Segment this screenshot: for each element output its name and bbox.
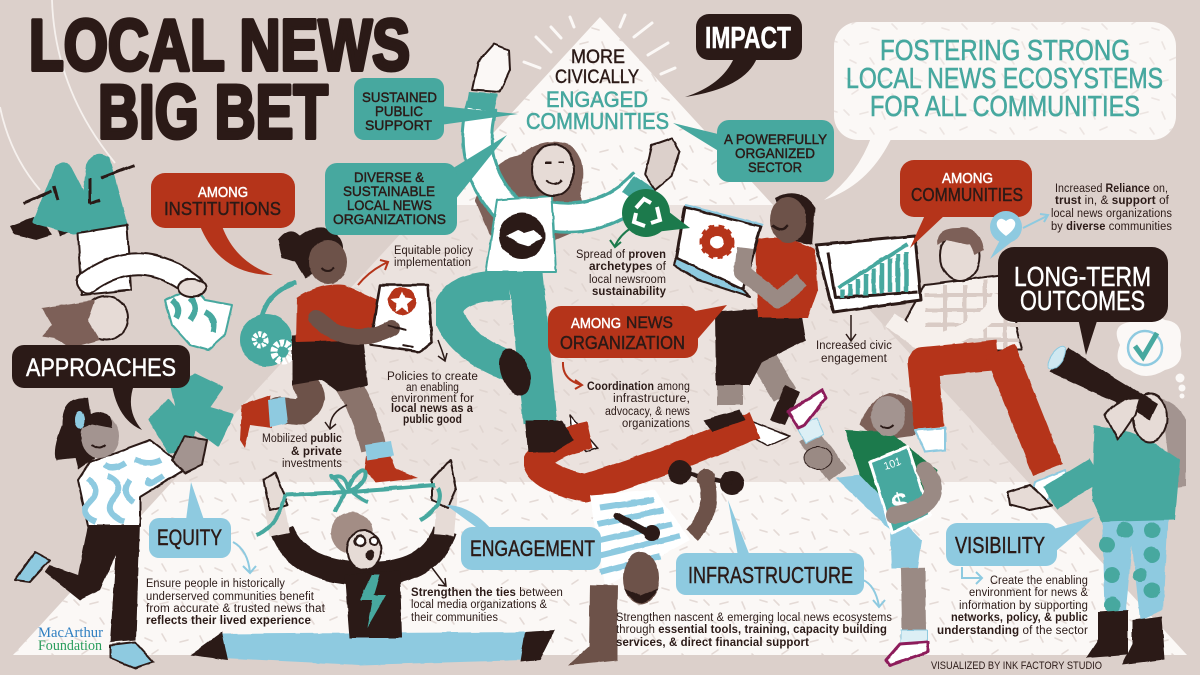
bubble: equity bbox=[149, 482, 231, 558]
bubble: long-term outcomes bbox=[998, 247, 1168, 355]
head bbox=[871, 396, 905, 436]
bubble: among news organization: NEWS bbox=[626, 313, 673, 332]
logo: MacArthur Foundation: MacArthur bbox=[38, 625, 103, 641]
shoes bbox=[190, 630, 555, 662]
bubble: sustained public support bbox=[354, 78, 518, 140]
raised arm bbox=[477, 105, 508, 210]
hair bbox=[475, 142, 590, 240]
hands bbox=[264, 460, 456, 510]
shoes bbox=[494, 345, 536, 399]
note: policies: local news as a bbox=[391, 403, 473, 415]
bubble: equity: EQUITY bbox=[157, 525, 222, 550]
note: engagement description bbox=[411, 587, 563, 624]
lower leg bbox=[603, 585, 604, 650]
hair bbox=[860, 393, 920, 440]
arrows between text and figures bbox=[233, 214, 1048, 607]
bubble: among news organization: ORGANIZATION bbox=[560, 333, 685, 353]
head bbox=[84, 296, 128, 340]
arms bbox=[282, 530, 445, 574]
signature lines bbox=[388, 325, 414, 347]
sock bbox=[901, 630, 927, 644]
teal sweater bbox=[1092, 425, 1180, 522]
head bbox=[309, 240, 347, 284]
arm with dumbbell bbox=[692, 482, 709, 535]
note: engagement description: local media organizations & bbox=[411, 599, 547, 611]
figure: upside-down person with puzzle bbox=[10, 155, 232, 350]
hand on leg bbox=[804, 447, 832, 469]
note: spread of archetypes bbox=[576, 249, 667, 298]
heading: impact statement text: CIVICALLY bbox=[555, 67, 639, 88]
face bbox=[347, 530, 381, 570]
red trousers bbox=[537, 425, 755, 488]
figure: person tying ribbon bbox=[190, 460, 555, 665]
recycle icon bbox=[622, 189, 690, 237]
polka trousers bbox=[1102, 515, 1168, 620]
gear balloon bbox=[240, 282, 296, 366]
head bbox=[81, 414, 119, 458]
side arm bbox=[530, 182, 645, 218]
heading: impact statement text: COMMUNITIES bbox=[526, 108, 669, 134]
note: civic engagement bbox=[816, 340, 892, 365]
bubble: long-term outcomes: OUTCOMES bbox=[1020, 285, 1145, 316]
sunburst rays at apex bbox=[524, 15, 675, 74]
legs bbox=[730, 345, 785, 405]
bubble: diverse and sustainable organizations: LOCAL NEWS bbox=[347, 197, 432, 213]
wrench bbox=[617, 516, 650, 534]
note: policies: an enabling bbox=[406, 382, 459, 394]
bubble: fostering strong ecosystems: FOR ALL COMMUNITIES bbox=[870, 91, 1140, 123]
note: mobilized investments bbox=[262, 433, 342, 470]
front leg bbox=[345, 380, 374, 450]
face bbox=[532, 144, 574, 196]
shirt torso bbox=[78, 225, 131, 295]
shirt grid bbox=[925, 280, 1020, 350]
hair bbox=[42, 300, 100, 348]
shoe bbox=[886, 642, 928, 665]
note: visibility description: environment for news & bbox=[969, 587, 1088, 599]
teal trousers bbox=[34, 155, 127, 233]
gear bbox=[706, 231, 728, 253]
shoes bbox=[703, 385, 800, 432]
hair top bbox=[78, 412, 112, 430]
shirt bbox=[905, 275, 1022, 350]
bubble: fostering strong ecosystems: FOSTERING STRONG bbox=[880, 35, 1130, 67]
figure: woman with puzzle piece bbox=[15, 375, 232, 668]
figure: green shirt person with money: $ bbox=[887, 486, 914, 523]
title: BIG BET bbox=[98, 70, 328, 155]
bubble: approaches bbox=[12, 345, 190, 430]
black trousers bbox=[45, 522, 140, 642]
bubble: long-term outcomes: LONG-TERM bbox=[1014, 261, 1151, 292]
note: mobilized investments: investments bbox=[282, 458, 342, 470]
note: policies: environment for bbox=[391, 393, 474, 405]
bubble: infrastructure bbox=[676, 500, 864, 595]
bubble: a powerfully organized sector: SECTOR bbox=[748, 159, 802, 175]
note: spread of archetypes: archetypes of bbox=[589, 261, 667, 273]
head bbox=[1133, 394, 1167, 442]
white shoes bbox=[570, 415, 790, 452]
arm bbox=[895, 470, 933, 515]
red shirt bbox=[296, 285, 378, 342]
blue legs bbox=[222, 632, 525, 665]
pants fold lines bbox=[24, 165, 135, 204]
bubble: visibility bbox=[946, 517, 1095, 566]
laptop base bbox=[674, 258, 750, 297]
bubble: among institutions: INSTITUTIONS bbox=[164, 199, 281, 219]
telescope bbox=[1050, 348, 1158, 420]
bubble: a powerfully organized sector: A POWERFULLY bbox=[724, 131, 828, 147]
star seal bbox=[388, 287, 416, 315]
bent leg bbox=[448, 285, 515, 368]
hand bbox=[1008, 485, 1052, 510]
bubble: infrastructure: INFRASTRUCTURE bbox=[688, 562, 853, 588]
head bbox=[770, 197, 806, 243]
note: among communities outcome: by diverse communities bbox=[1051, 221, 1172, 233]
note: among communities outcome: local news organizations bbox=[1051, 208, 1172, 220]
arm bbox=[316, 318, 392, 337]
note: spread of archetypes: sustainability bbox=[592, 286, 666, 298]
standing leg bbox=[913, 568, 914, 630]
forearms bbox=[272, 490, 448, 535]
note: among communities outcome: trust in, & support of bbox=[1055, 195, 1170, 207]
head upside-down bbox=[623, 552, 659, 604]
hair bbox=[938, 228, 984, 255]
heading: impact statement text bbox=[526, 47, 669, 134]
hand on telescope bbox=[1105, 398, 1140, 440]
note: among communities outcome: Increased Reliance on, bbox=[1055, 183, 1168, 195]
credit line: VISUALIZED BY INK FACTORY STUDIO bbox=[931, 660, 1102, 672]
logo: MacArthur Foundation bbox=[38, 625, 103, 654]
red leg back bbox=[923, 355, 998, 428]
polka dots bbox=[1099, 522, 1160, 613]
bubble: among institutions: AMONG bbox=[198, 184, 248, 201]
note: infrastructure description: services, & direct financial support bbox=[616, 637, 809, 649]
bubble: approaches: APPROACHES bbox=[26, 354, 176, 382]
note: coordination: Coordination among bbox=[587, 381, 690, 393]
bubble: among news organization: AMONG bbox=[571, 315, 621, 332]
note: civic engagement: Increased civic bbox=[816, 340, 892, 352]
heading: impact statement text: MORE bbox=[571, 47, 625, 68]
hair bbox=[1150, 396, 1186, 488]
dumbbell bbox=[668, 460, 744, 495]
note: visibility description bbox=[937, 575, 1088, 637]
title: LOCAL NEWS bbox=[29, 6, 410, 86]
laptop screen bbox=[676, 207, 761, 290]
shirt bbox=[486, 196, 556, 272]
bubble: among communities bbox=[900, 160, 1032, 248]
figure: person with red trousers and wrench bbox=[537, 415, 790, 665]
figure: teal central woman reaching upward bbox=[448, 44, 680, 452]
bubble: diverse and sustainable organizations: DIVERSE & bbox=[354, 169, 425, 185]
mouth bbox=[366, 550, 374, 560]
boots bbox=[240, 395, 272, 448]
figure: telescope person bbox=[1008, 344, 1186, 665]
note: coordination: advocacy, & news bbox=[605, 406, 690, 418]
bubble: among institutions bbox=[151, 173, 295, 275]
note: coordination bbox=[587, 381, 690, 430]
note: equity description bbox=[146, 578, 326, 627]
handshake logo bbox=[499, 213, 545, 259]
bubble: diverse and sustainable organizations bbox=[325, 135, 507, 235]
blue shorts bbox=[836, 475, 922, 568]
torso bbox=[345, 570, 402, 638]
hands bbox=[172, 436, 207, 473]
figure: green shirt person with money: 101 bbox=[882, 455, 903, 473]
bubble: sustained public support: SUPPORT bbox=[365, 117, 432, 133]
arm bbox=[88, 264, 192, 285]
note: spread of archetypes: Spread of proven bbox=[576, 249, 666, 261]
hair braids bbox=[775, 193, 815, 245]
note: mobilized investments: Mobilized public bbox=[262, 433, 342, 445]
heading: impact statement text: ENGAGED bbox=[546, 87, 648, 112]
note: coordination: organizations bbox=[622, 418, 690, 430]
bubble: sustained public support: SUSTAINED bbox=[362, 89, 437, 105]
shoes bbox=[15, 552, 153, 668]
second hand bbox=[645, 138, 680, 190]
raised hand bbox=[472, 44, 510, 92]
note: coordination: infrastructure, bbox=[613, 393, 690, 405]
pyramid top tier: impact bbox=[427, 17, 773, 205]
second cuff bbox=[622, 176, 656, 204]
note: policies bbox=[387, 371, 478, 426]
logo: MacArthur Foundation: Foundation bbox=[38, 638, 102, 654]
hand bbox=[178, 279, 206, 297]
note: visibility description: information by supporting bbox=[959, 600, 1088, 612]
note: equity description: reflects their lived experience bbox=[146, 615, 311, 627]
note: infrastructure description: Strengthen nascent & emerging local news ecosystems bbox=[616, 612, 892, 624]
figure: woman with laptop bbox=[674, 193, 818, 432]
red shirt bbox=[755, 238, 818, 318]
ribbon bbox=[256, 470, 440, 535]
arm bbox=[890, 295, 1000, 345]
money bbox=[870, 447, 930, 533]
note: infrastructure description bbox=[616, 612, 892, 649]
patterned top bbox=[78, 440, 184, 526]
note: spread of archetypes: local newsroom bbox=[589, 274, 666, 286]
note: equitable policy: Equitable policy bbox=[394, 245, 473, 257]
ponytail bbox=[55, 398, 95, 470]
striped shirt bbox=[590, 490, 690, 586]
note: equity description: Ensure people in historically bbox=[146, 578, 285, 590]
note: equitable policy bbox=[394, 245, 473, 269]
bubble: sustained public support: PUBLIC bbox=[375, 103, 423, 119]
note: equity description: from accurate & trusted news that bbox=[146, 603, 326, 615]
bubble: impact bbox=[685, 14, 802, 97]
standing leg bbox=[525, 268, 540, 422]
white shoes bbox=[915, 428, 1070, 505]
bubble: engagement bbox=[446, 505, 601, 570]
note: visibility description: Create the enabling bbox=[990, 575, 1088, 587]
lightning bolt bbox=[360, 575, 386, 628]
sock bbox=[797, 418, 824, 443]
puzzle piece bbox=[150, 375, 232, 452]
arm bbox=[742, 248, 802, 300]
raised leg bbox=[808, 435, 838, 475]
figure: community man with chart and red trousers bbox=[816, 228, 1070, 505]
bubble: engagement: ENGAGEMENT bbox=[470, 536, 595, 561]
note: equitable policy: implementation bbox=[394, 257, 471, 269]
bubble: a powerfully organized sector: ORGANIZED bbox=[735, 145, 815, 161]
note: engagement description: their communities bbox=[411, 612, 498, 624]
note: among communities outcome bbox=[1051, 183, 1172, 233]
lens bbox=[1045, 344, 1069, 372]
note: mobilized investments: & private bbox=[291, 446, 342, 458]
thought cloud with check bbox=[1117, 314, 1186, 398]
red leg front bbox=[1000, 350, 1048, 470]
paper bbox=[370, 285, 432, 352]
bubble: among news organization bbox=[548, 305, 727, 358]
black trousers bbox=[715, 305, 806, 385]
pyramid middle tier: long-term outcomes bbox=[172, 205, 1028, 482]
green shirt bbox=[845, 430, 938, 508]
glasses bbox=[355, 536, 365, 546]
bubble: a powerfully organized sector bbox=[673, 120, 834, 182]
note: visibility description: understanding of the sector bbox=[937, 625, 1088, 637]
arm bbox=[1050, 470, 1096, 498]
bubble: among communities: COMMUNITIES bbox=[911, 185, 1023, 205]
figure: running person with policy paper bbox=[240, 228, 432, 483]
shoes bbox=[10, 216, 72, 240]
blue scrunchie bbox=[75, 411, 85, 429]
note: infrastructure description: through essential tools, training, capacity building bbox=[616, 624, 887, 636]
note: visibility description: networks, policy, & public bbox=[951, 612, 1088, 624]
note: engagement description: Strengthen the ties between bbox=[411, 587, 563, 599]
pyramid bottom tier: approaches bbox=[13, 482, 1187, 655]
chart monitor bbox=[816, 236, 921, 312]
note: civic engagement: engagement bbox=[821, 353, 888, 365]
bubble: fostering strong ecosystems bbox=[824, 22, 1176, 200]
shorts bbox=[292, 332, 368, 392]
back leg bbox=[278, 385, 311, 412]
figure: green shirt person with money bbox=[788, 390, 938, 665]
puzzle in hands bbox=[165, 288, 232, 350]
bubble: among communities: AMONG bbox=[942, 170, 993, 187]
note: equity description: underserved communities benefit bbox=[146, 591, 315, 603]
bubble: visibility: VISIBILITY bbox=[955, 532, 1045, 558]
foot bbox=[568, 645, 618, 665]
hair bbox=[278, 228, 343, 278]
hair bbox=[331, 512, 373, 554]
note: policies: public good bbox=[403, 414, 462, 426]
bubble: impact: IMPACT bbox=[705, 20, 791, 55]
boots bbox=[1086, 610, 1165, 665]
title bbox=[29, 6, 410, 155]
note: policies: Policies to create bbox=[387, 371, 478, 383]
raised shoe bbox=[788, 390, 826, 428]
bubble: diverse and sustainable organizations: ORGANIZATIONS bbox=[333, 211, 446, 227]
decorative white swoosh lines bbox=[0, 0, 115, 190]
cuff bbox=[466, 92, 498, 112]
head bbox=[940, 231, 980, 281]
icon: heart balloon bbox=[990, 211, 1022, 259]
bubble: diverse and sustainable organizations: SUSTAINABLE bbox=[343, 183, 435, 199]
